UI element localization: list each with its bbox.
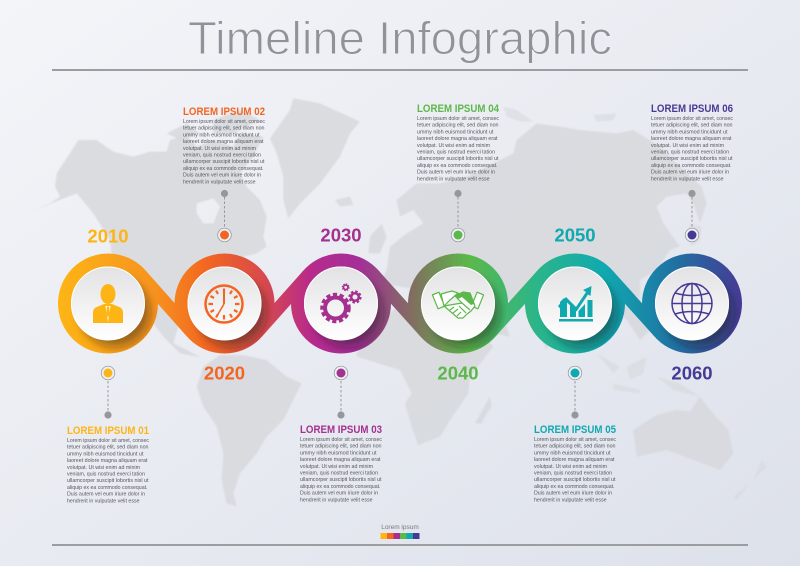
text block 06 xyxy=(651,103,733,182)
text block 01: tetuer adipiscing elit, sed diam non xyxy=(67,445,148,451)
text block 06: veniam, quis nostrud exerci tation xyxy=(651,150,729,156)
ring shadows xyxy=(80,277,734,347)
text block 05: volutpat. Ut wisi enim ad minim xyxy=(534,464,607,470)
connector 06 xyxy=(685,190,699,242)
text block 03: ummy nibh euismod tincidunt ut xyxy=(300,450,377,456)
connector 03 xyxy=(334,366,348,419)
white discs xyxy=(72,267,728,340)
text block 06: LOREM IPSUM 06 xyxy=(651,103,733,115)
title: Timeline Infographic xyxy=(188,12,612,64)
text block 05: aliquip ex ea commodo consequat. xyxy=(534,484,615,490)
text block 01: Lorem ipsum dolor sit amet, consec xyxy=(67,438,149,444)
text block 01: LOREM IPSUM 01 xyxy=(67,425,149,437)
text block 01: ullamcorper suscipit lobortis nisl ut xyxy=(67,478,149,484)
text block 04: volutpat. Ut wisi enim ad minim xyxy=(417,143,490,149)
icon: globe xyxy=(672,284,712,324)
text block 01: veniam, quis nostrud exerci tation xyxy=(67,472,145,478)
text block 03: volutpat. Ut wisi enim ad minim xyxy=(300,464,373,470)
text block 01: laoreet dolore magna aliquam erat xyxy=(67,458,148,464)
text block 04: laoreet dolore magna aliquam erat xyxy=(417,136,498,142)
text block 05: hendrerit in vulputate velit esse xyxy=(534,497,606,503)
text block 06: ummy nibh euismod tincidunt ut xyxy=(651,129,728,135)
text block 04: Lorem ipsum dolor sit amet, consec xyxy=(417,116,499,122)
text block 02: laoreet dolore magna aliquam erat xyxy=(183,139,264,145)
footer label: Lorem ipsum xyxy=(381,524,419,531)
text block 04: tetuer adipiscing elit, sed diam non xyxy=(417,123,498,129)
text block 06: aliquip ex ea commodo consequat. xyxy=(651,163,732,169)
text block 04: veniam, quis nostrud exerci tation xyxy=(417,150,495,156)
connector 04 xyxy=(451,190,465,242)
text block 03: hendrerit in vulputate velit esse xyxy=(300,497,372,503)
text block 06: laoreet dolore magna aliquam erat xyxy=(651,136,732,142)
text block 02: ummy nibh euismod tincidunt ut xyxy=(183,132,260,138)
text block 04 xyxy=(417,103,500,182)
icon: businessman xyxy=(93,284,123,323)
text block 05: laoreet dolore magna aliquam erat xyxy=(534,457,615,463)
bottom divider xyxy=(52,544,748,546)
text block 06: Lorem ipsum dolor sit amet, consec xyxy=(651,116,733,122)
text block 04: aliquip ex ea commodo consequat. xyxy=(417,163,498,169)
world map xyxy=(33,98,767,507)
connector 02 xyxy=(218,190,231,242)
text block 06: hendrerit in vulputate velit esse xyxy=(651,176,724,182)
text block 04: hendrerit in vulputate velit esse xyxy=(417,176,490,182)
year 2020: 2020 xyxy=(204,362,245,384)
text block 06: ullamcorper suscipit lobortis nisl ut xyxy=(651,156,733,162)
text block 05: ummy nibh euismod tincidunt ut xyxy=(534,450,611,456)
text block 03 xyxy=(300,424,382,503)
text block 02: LOREM IPSUM 02 xyxy=(183,106,265,118)
text block 05: veniam, quis nostrud exerci tation xyxy=(534,470,612,476)
text block 02: volutpat. Ut wisi enim ad minim xyxy=(183,146,256,152)
text block 03: tetuer adipiscing elit, sed diam non xyxy=(300,444,382,450)
connector 01 xyxy=(101,366,115,419)
text block 01: volutpat. Ut wisi enim ad minim xyxy=(67,465,140,471)
text block 05: Lorem ipsum dolor sit amet, consec xyxy=(534,437,616,443)
text block 01: hendrerit in vulputate velit esse xyxy=(67,498,140,504)
text block 03: Duis autem vel eum iriure dolor in xyxy=(300,491,378,497)
text block 03: Lorem ipsum dolor sit amet, consec xyxy=(300,437,382,443)
text block 02: veniam, quis nostrud exerci tation xyxy=(183,152,261,158)
text block 04: Duis autem vel eum iriure dolor in xyxy=(417,170,495,176)
text block 02 xyxy=(183,106,265,185)
text block 02: aliquip ex ea commodo consequat. xyxy=(183,166,264,172)
text block 04: ummy nibh euismod tincidunt ut xyxy=(417,129,494,135)
text block 05: tetuer adipiscing elit, sed diam non xyxy=(534,444,616,450)
text block 01: aliquip ex ea commodo consequat. xyxy=(67,485,148,491)
icon: handshake xyxy=(432,291,484,318)
icon: clock xyxy=(206,286,242,322)
text block 01: ummy nibh euismod tincidunt ut xyxy=(67,451,144,457)
text block 05: ullamcorper suscipit lobortis nisl ut xyxy=(534,477,616,483)
text block 02: Lorem ipsum dolor sit amet, consec xyxy=(183,119,265,125)
text block 02: tetuer adipiscing elit, sed diam non xyxy=(183,126,264,132)
text block 03: veniam, quis nostrud exerci tation xyxy=(300,470,378,476)
text block 03: laoreet dolore magna aliquam erat xyxy=(300,457,381,463)
text block 04: ullamcorper suscipit lobortis nisl ut xyxy=(417,156,499,162)
text block 05: Duis autem vel eum iriure dolor in xyxy=(534,491,612,497)
text block 05: LOREM IPSUM 05 xyxy=(534,424,616,436)
text block 03: LOREM IPSUM 03 xyxy=(300,424,382,436)
text block 02: Duis autem vel eum iriure dolor in xyxy=(183,173,261,179)
text block 01: Duis autem vel eum iriure dolor in xyxy=(67,492,145,498)
text block 02: hendrerit in vulputate velit esse xyxy=(183,179,256,185)
year 2050: 2050 xyxy=(554,224,596,246)
icon: growth chart xyxy=(558,286,593,322)
text block 06: tetuer adipiscing elit, sed diam non xyxy=(651,123,732,129)
text block 02: ullamcorper suscipit lobortis nisl ut xyxy=(183,159,265,165)
text block 06: volutpat. Ut wisi enim ad minim xyxy=(651,143,724,149)
text block 01 xyxy=(67,425,149,504)
year 2060: 2060 xyxy=(671,362,713,384)
text block 03: ullamcorper suscipit lobortis nisl ut xyxy=(300,477,382,483)
year 2040: 2040 xyxy=(437,362,479,384)
icon: gears xyxy=(322,284,361,322)
text block 04: LOREM IPSUM 04 xyxy=(417,103,500,115)
connector 05 xyxy=(568,366,582,419)
text block 05 xyxy=(534,424,616,503)
top divider xyxy=(52,69,748,71)
timeline ribbon xyxy=(64,260,736,347)
text block 06: Duis autem vel eum iriure dolor in xyxy=(651,170,729,176)
text block 03: aliquip ex ea commodo consequat. xyxy=(300,484,381,490)
year 2030: 2030 xyxy=(320,224,362,246)
footer colour bar xyxy=(380,533,420,539)
year 2010: 2010 xyxy=(87,226,129,246)
